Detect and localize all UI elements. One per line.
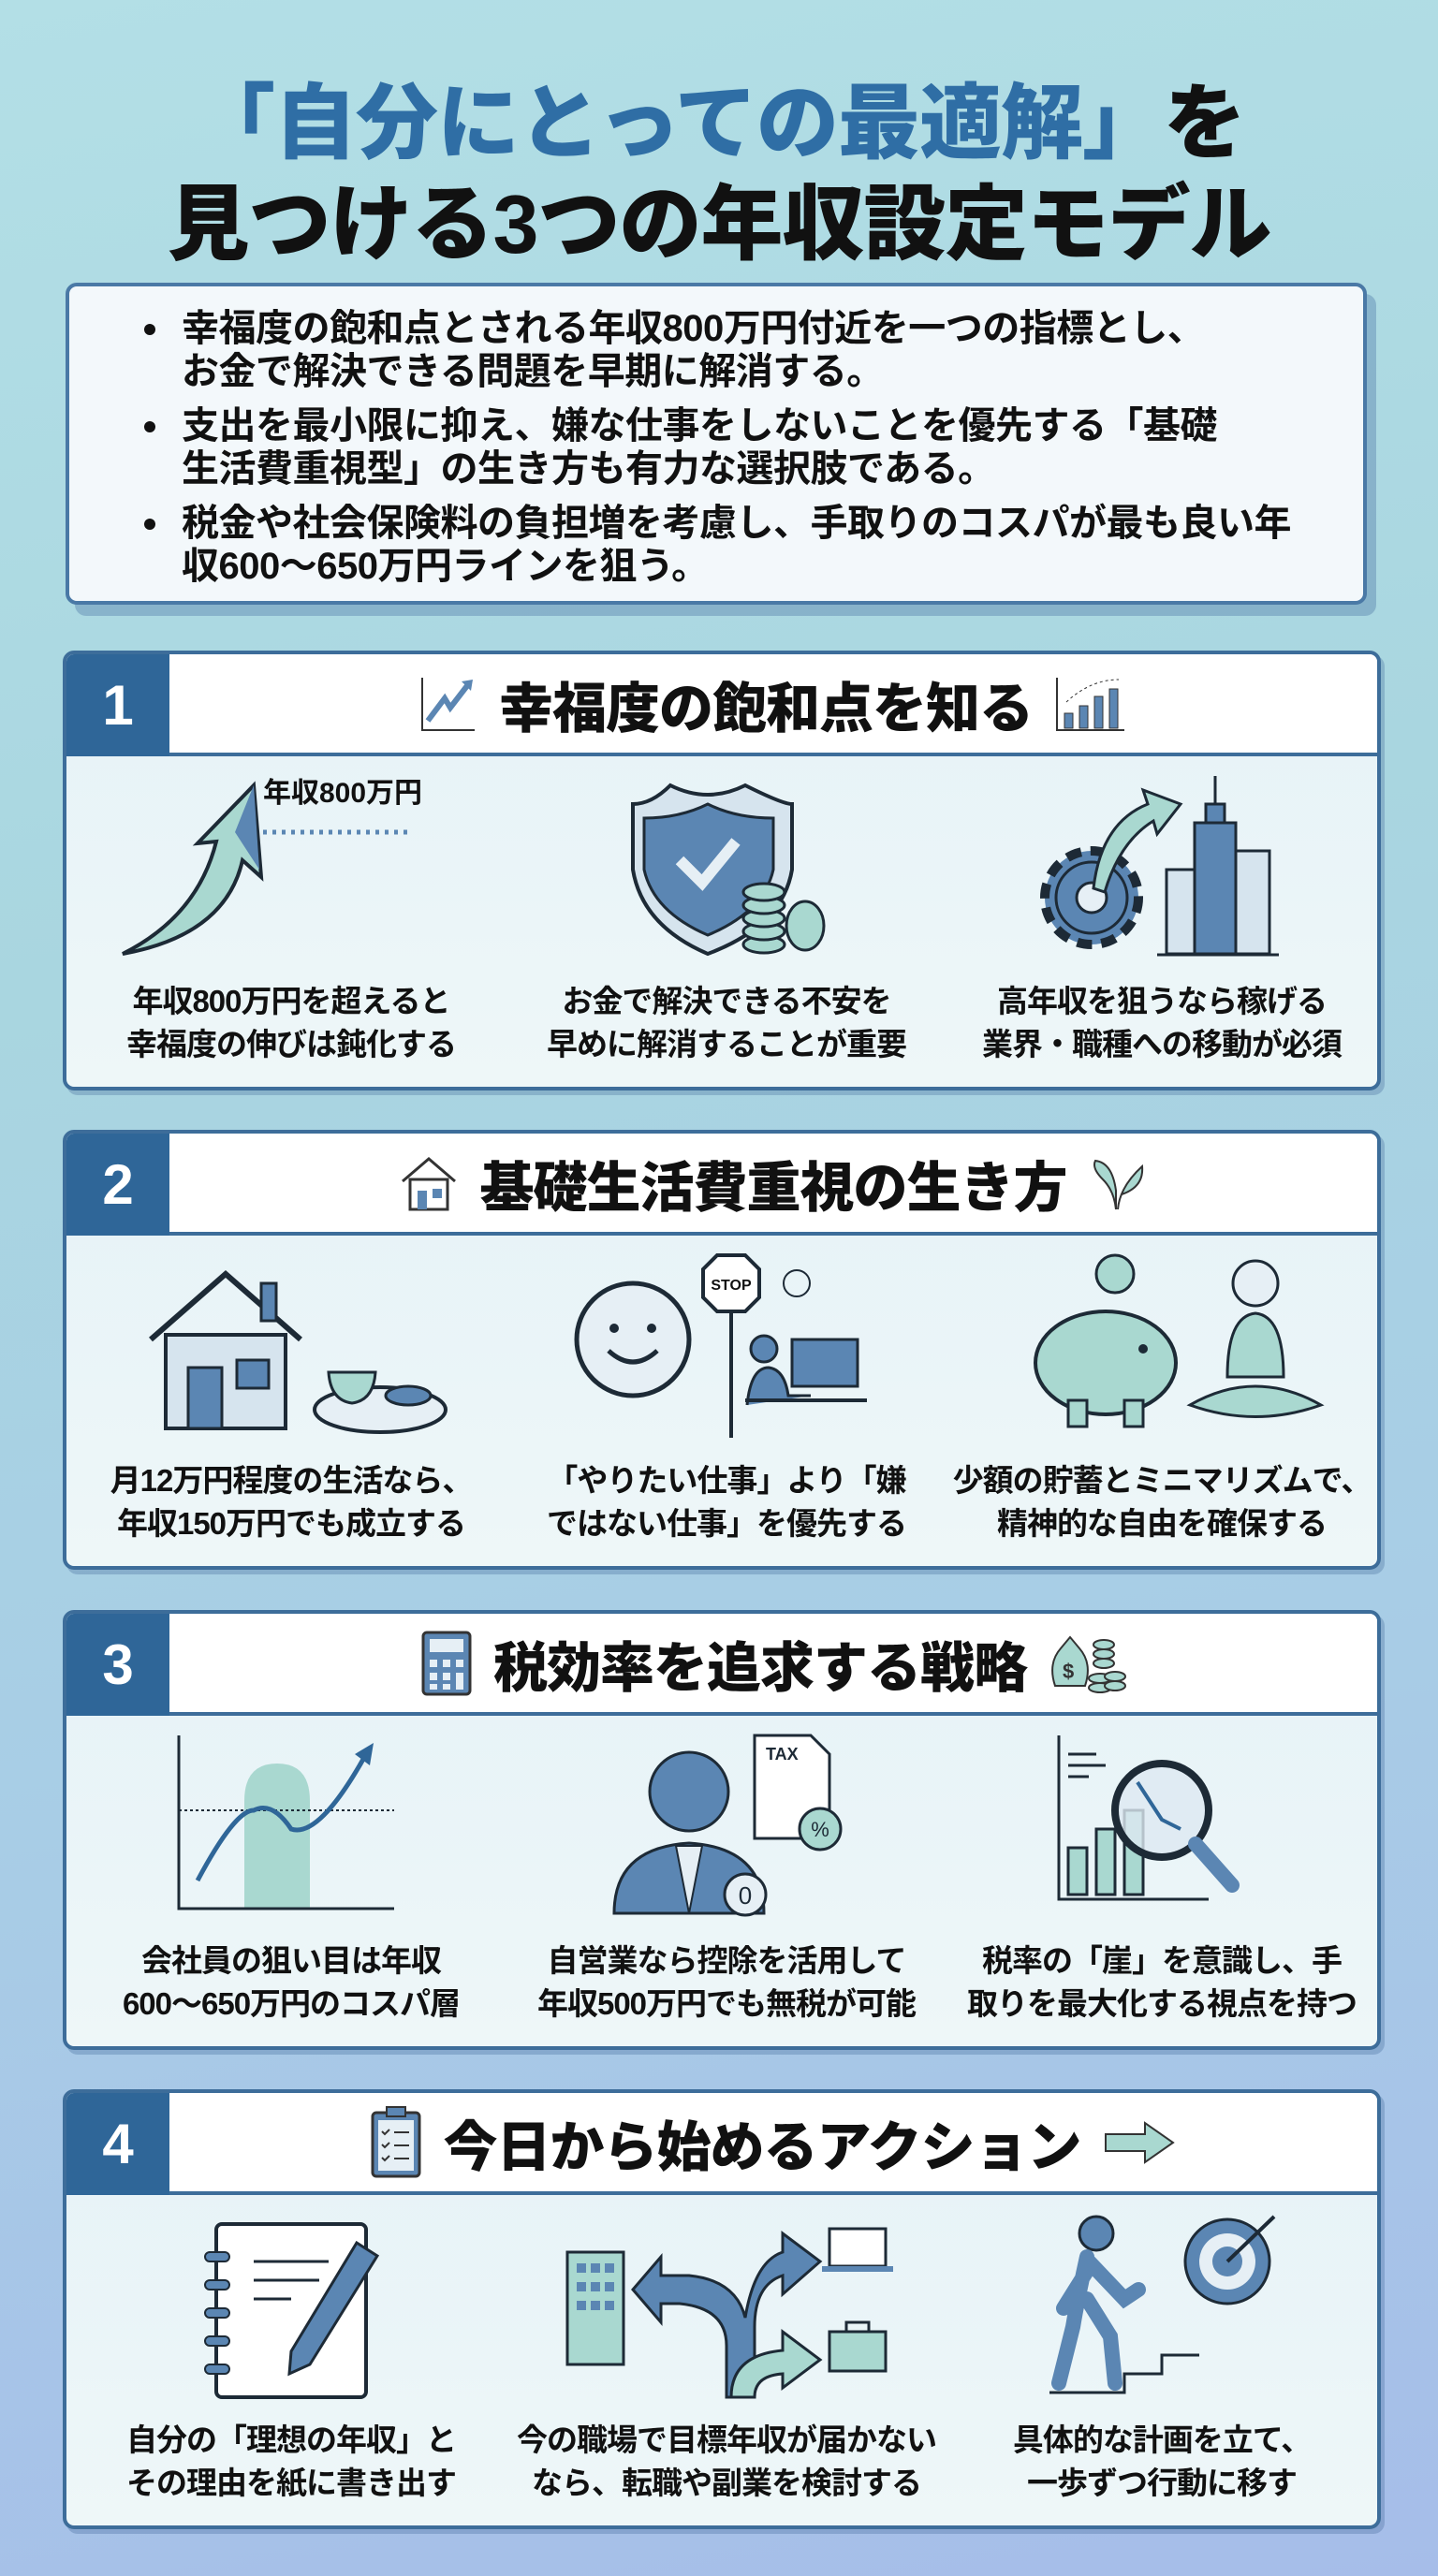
item: crossroad: 今の職場で目標年収が届かない: [517, 2422, 936, 2457]
item: person tax: TAX: [766, 1745, 799, 1764]
header 3: 3: [102, 1633, 134, 1696]
item: person tax: 年収500万円でも無税が可能: [537, 1986, 916, 2021]
item: curve arrow: 年収800万円を超えると: [132, 984, 450, 1018]
item: crossroad: なら、転職や副業を検討する: [532, 2466, 921, 2500]
header 1: [66, 654, 1377, 756]
header 1: 1: [102, 674, 134, 737]
summary box: お金で解決できる問題を早期に解消する。: [182, 351, 884, 392]
item: piggy meditate: 精神的な自由を確保する: [997, 1506, 1327, 1541]
item: shield coins: [547, 783, 906, 1061]
summary box: 生活費重視型」の生き方も有力な選択肢である。: [182, 448, 995, 490]
item: cost curve chart: 600〜650万円のコスパ層: [123, 1986, 460, 2021]
item: smile stop: STOP: [711, 1278, 752, 1294]
item: house food: [110, 1270, 472, 1541]
header 3: $: [1063, 1659, 1074, 1683]
item: smile stop: ではない仕事」を優先する: [547, 1506, 906, 1541]
panel: section 3: [63, 1610, 1381, 2050]
header 3: 税効率を追求する戦略: [493, 1638, 1027, 1698]
item: curve arrow: 年収800万円: [263, 778, 422, 809]
item: cost curve chart: [123, 1735, 460, 2021]
item: smile stop: [547, 1253, 906, 1541]
item: person tax: 自営業なら控除を活用して: [547, 1943, 906, 1978]
item: house food: 年収150万円でも成立する: [117, 1506, 465, 1541]
item: gear building: 業界・職種への移動が必須: [982, 1027, 1342, 1061]
item: gear building: [982, 776, 1343, 1061]
item: curve arrow: 幸福度の伸びは鈍化する: [126, 1027, 456, 1061]
summary box: 幸福度の飽和点とされる年収800万円付近を一つの指標とし、: [182, 308, 1204, 349]
panel: section 1: [63, 651, 1381, 1090]
item: curve arrow: [122, 778, 456, 1061]
item: notebook pen: 自分の「理想の年収」と: [126, 2422, 456, 2457]
item: walk target: [1013, 2215, 1311, 2500]
summary box: 収600〜650万円ラインを狙う。: [182, 546, 709, 587]
summary box: 税金や社会保険料の負担増を考慮し、手取りのコスパが最も良い年: [182, 503, 1291, 544]
summary box: 支出を最小限に抑え、嫌な仕事をしないことを優先する「基礎: [182, 405, 1217, 446]
title: [168, 77, 1270, 271]
header 2: 基礎生活費重視の生き方: [479, 1157, 1067, 1219]
item: gear building: 高年収を狙うなら稼げる: [997, 984, 1327, 1018]
item: notebook pen: その理由を紙に書き出す: [126, 2466, 456, 2500]
header 1: 幸福度の飽和点を知る: [499, 678, 1033, 739]
item: magnifier bars: 取りを最大化する視点を持つ: [967, 1986, 1357, 2021]
title: 見つける3つの年収設定モデル: [168, 178, 1270, 271]
header 2: [66, 1134, 1377, 1236]
item: house food: 月12万円程度の生活なら、: [110, 1463, 472, 1498]
item: shield coins: お金で解決できる不安を: [562, 984, 891, 1018]
item: cost curve chart: 会社員の狙い目は年収: [141, 1943, 441, 1978]
item: smile stop: 「やりたい仕事」より「嫌: [547, 1463, 906, 1498]
item: magnifier bars: 税率の「崖」を意識し、手: [982, 1943, 1342, 1978]
item: magnifier bars: [967, 1735, 1357, 2021]
item: person tax: [537, 1734, 916, 2021]
item: shield coins: 早めに解消することが重要: [547, 1027, 906, 1061]
item: walk target: 具体的な計画を立て、: [1013, 2422, 1311, 2457]
item: piggy meditate: [953, 1254, 1371, 1541]
header 4: [66, 2093, 1377, 2195]
item: notebook pen: [126, 2222, 456, 2500]
item: piggy meditate: 少額の貯蓄とミニマリズムで、: [953, 1463, 1371, 1498]
panel: section 4: [63, 2089, 1381, 2529]
panel: section 2: [63, 1130, 1381, 1570]
header 2: 2: [102, 1153, 134, 1216]
item: walk target: 一歩ずつ行動に移す: [1027, 2466, 1297, 2500]
header 4: 4: [102, 2113, 134, 2175]
header 4: 今日から始めるアクション: [443, 2117, 1081, 2177]
header 3: [66, 1614, 1377, 1716]
title: 「自分にとっての最適解」を: [193, 77, 1245, 169]
item: crossroad: [517, 2228, 936, 2500]
item: person tax: %: [811, 1818, 829, 1841]
summary box: [66, 283, 1367, 605]
item: person tax: 0: [739, 1881, 752, 1910]
